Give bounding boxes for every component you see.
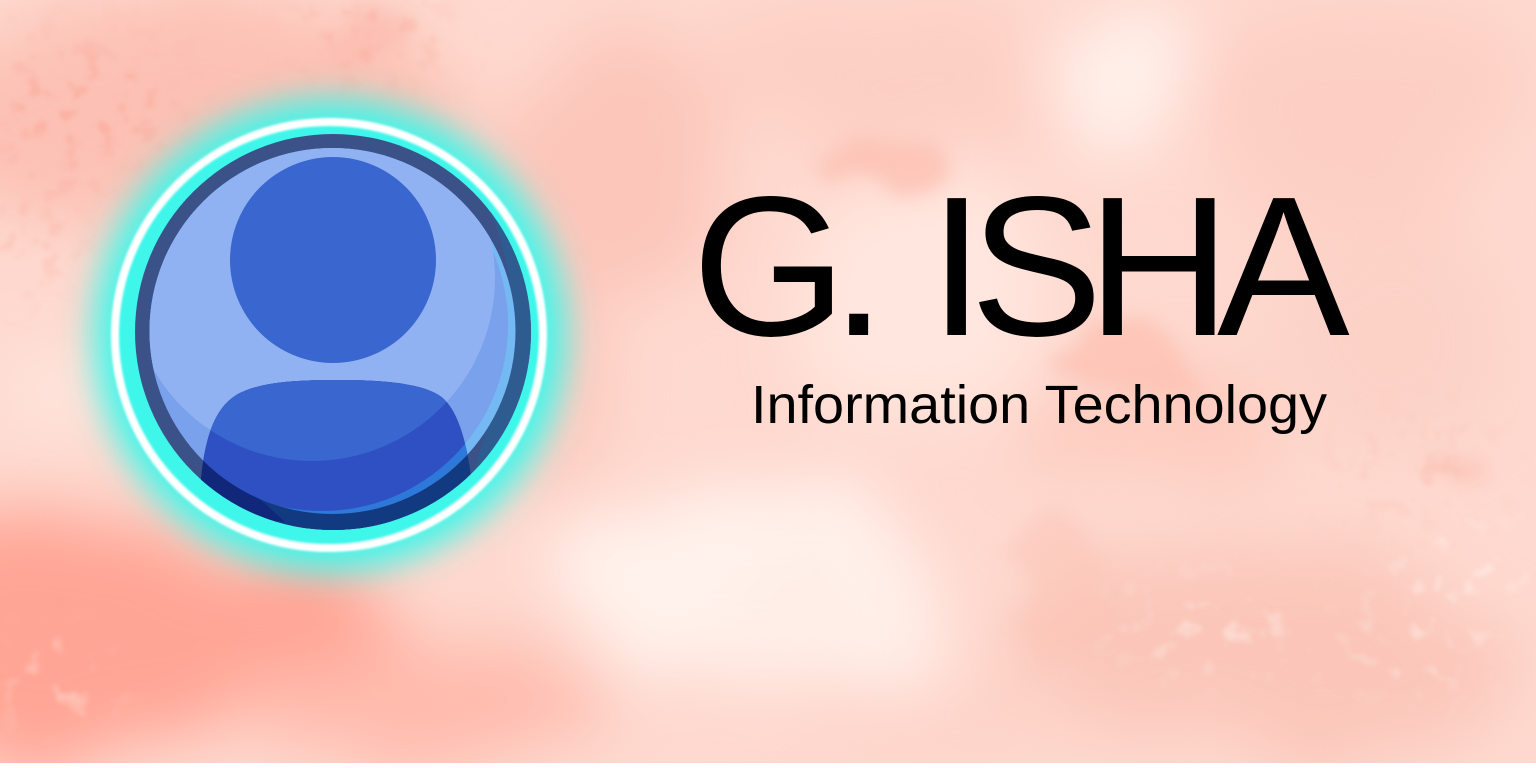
head	[230, 157, 436, 363]
avatar badge with glowing ring	[94, 95, 600, 571]
shoulders	[200, 380, 471, 530]
white ring	[115, 122, 543, 548]
cyan glow	[94, 99, 566, 571]
profile disc	[135, 134, 531, 530]
title: G. ISHA	[692, 156, 1350, 378]
subtitle: Information Technology	[751, 375, 1327, 435]
inner glow fill	[116, 121, 544, 549]
